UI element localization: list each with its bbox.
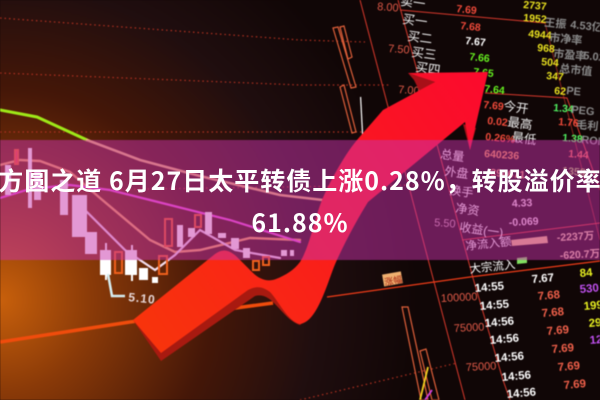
dotted grid lines (0, 18, 457, 400)
volume column: 62 (554, 85, 567, 98)
order book prices: 7.65 (473, 66, 494, 80)
order book prices: 7.69 (483, 99, 504, 113)
yellow and pink volume lines (420, 367, 432, 400)
time and sales table: 84 (579, 267, 594, 280)
volume column: 1.76 (558, 116, 579, 130)
order book prices: 4.33 (512, 197, 533, 210)
time and sales table: 7.69 (551, 342, 575, 356)
blurred side labels: 王振 (544, 15, 567, 31)
order book labels: 买二 (407, 29, 433, 46)
volume column: 4944 (528, 28, 552, 42)
order book prices: 7.66 (469, 51, 490, 65)
time and sales table: 7.69 (557, 360, 581, 374)
blurred side labels: 总市值 (559, 61, 593, 78)
order book prices: 640236 (484, 148, 520, 162)
price axis labels: 7.00 (398, 84, 420, 97)
blurred side labels: 市净率 (549, 30, 583, 47)
order book labels: 收益(一) (459, 220, 504, 240)
price axis labels (377, 1, 497, 374)
time and sales table: 14:56 (494, 350, 525, 365)
low price marker (108, 274, 156, 307)
order book labels: 买四 (415, 60, 441, 77)
low price marker: 5.10 (128, 290, 156, 307)
title line 2: 61.88% (251, 204, 349, 240)
blurred side labels: 毛利 (576, 117, 599, 133)
order book prices: -620.7万 (560, 248, 600, 262)
blurred side labels: 市盈率 (553, 46, 587, 63)
order book labels: 净资 (455, 201, 480, 218)
order book labels: 买三 (411, 45, 437, 62)
order book prices: 7.64 (484, 83, 505, 97)
volume column (523, 0, 589, 179)
order book labels (400, 0, 538, 276)
time and sales table: 530 (579, 282, 599, 296)
time and sales table: 7.69 (563, 378, 587, 392)
time and sales table: 7.69 (546, 324, 570, 338)
volume column: 504 (541, 56, 559, 70)
volume column: 1.38 (562, 132, 583, 146)
volume column: 1952 (523, 12, 547, 26)
time and sales table: 7.68 (541, 306, 565, 320)
order book labels: 最高 (507, 114, 533, 132)
time and sales table (474, 267, 600, 400)
order book labels: 换手 (449, 183, 474, 200)
price axis labels: 75000 (466, 360, 497, 374)
order book prices: 0.02 (487, 115, 508, 129)
order book labels: 大宗流入 (469, 257, 517, 276)
perspective candle outlines (333, 26, 439, 400)
order book prices: 7.67 (465, 35, 486, 49)
orange trend line (0, 303, 273, 342)
volume column: 1.44 (568, 148, 589, 162)
time and sales table: 7.67 (531, 272, 555, 286)
price axis line (327, 0, 600, 400)
time and sales table: 14:56 (489, 332, 520, 347)
blurred side labels (544, 15, 600, 148)
price axis labels: 75000 (454, 321, 485, 335)
order book labels: 最低 (511, 130, 538, 148)
red rising arrow (133, 72, 488, 361)
title line 1: 方圆之道 6月27日太平转债上涨0.28%，转股溢价率 (0, 162, 600, 198)
order book prices: 7.69 (456, 3, 477, 17)
order book labels: 总量 (440, 147, 465, 164)
price axis labels: 7.50 (388, 43, 410, 56)
candlesticks (5, 97, 363, 283)
volume column: 968 (537, 42, 555, 56)
order book prices: 394671 (490, 167, 526, 181)
order book labels: 买一 (402, 12, 428, 29)
price axis labels: 5.50 (434, 217, 456, 230)
small label tag: 涨幅 (383, 273, 403, 287)
volume column: 1358 (562, 165, 586, 179)
order book labels: 今开 (503, 98, 529, 116)
time and sales table: 14:55 (474, 280, 505, 295)
volume column: 1.34 (553, 102, 574, 116)
blurred side labels: PEG (571, 104, 595, 118)
time and sales table: 7.68 (537, 289, 561, 303)
moving average lines (0, 110, 340, 270)
order book prices: -0.069 (509, 215, 539, 229)
order book prices: -2237万 (557, 230, 594, 244)
time and sales table: 14:56 (484, 315, 515, 330)
order book prices: 0.26% (485, 131, 516, 146)
price axis labels: 100000 (441, 291, 478, 305)
capital flow bars (511, 236, 548, 264)
time and sales table: 14:55 (479, 298, 510, 313)
red candlesticks (15, 150, 269, 274)
volume column: 347 (546, 70, 564, 84)
order book labels: 外盘 (444, 163, 469, 181)
price axis labels: 8.00 (377, 1, 399, 14)
order book labels: 净流入额 (465, 234, 513, 253)
order book prices: 7.68 (460, 20, 481, 34)
order book prices (456, 3, 600, 262)
blurred side labels: PE (566, 85, 582, 99)
magenta title band (0, 140, 600, 260)
time and sales table: 14:56 (501, 369, 532, 384)
